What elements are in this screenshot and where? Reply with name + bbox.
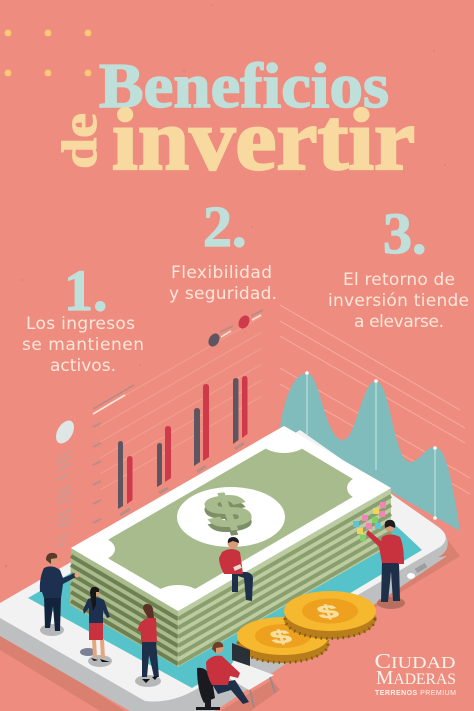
stack left side	[70, 548, 178, 667]
benefit 3: a elevarse.	[354, 312, 444, 332]
title: Beneficios	[99, 50, 389, 121]
dollar symbol: $	[198, 490, 258, 543]
money stack	[69, 426, 391, 667]
benefit 3: El retorno de	[343, 270, 455, 290]
benefit 1: se mantienen	[22, 335, 144, 355]
desk	[225, 660, 274, 690]
brand logo: MADERAS	[376, 667, 456, 689]
chart grid lines	[100, 305, 470, 494]
chair	[196, 668, 220, 710]
benefit 1	[22, 258, 144, 376]
person in suit	[40, 553, 80, 636]
brand logo	[374, 649, 456, 697]
phone drop shadow	[0, 530, 460, 711]
bill corner scallops	[69, 427, 389, 611]
laptop	[232, 643, 250, 666]
phone screen	[28, 440, 422, 688]
title: de	[51, 113, 107, 169]
benefit 2	[169, 194, 277, 304]
benefit 2: 2.	[203, 194, 246, 259]
person at desk	[196, 642, 275, 710]
benefit 3	[328, 201, 469, 332]
person seated on stack	[219, 537, 253, 601]
decorative dots	[5, 30, 91, 76]
benefit 2: y seguridad.	[169, 284, 277, 304]
benefit 1: 1.	[64, 258, 108, 323]
sticky notes	[353, 502, 386, 541]
coins	[237, 591, 376, 663]
bar chart	[118, 376, 248, 515]
chart axis labels	[52, 385, 134, 547]
woman with skirt	[80, 587, 112, 667]
benefit 3: 3.	[383, 201, 426, 266]
dollar symbol: $	[198, 485, 258, 538]
benefit 1: Los ingresos	[26, 314, 135, 334]
bill top	[71, 426, 391, 611]
benefit 1: activos.	[50, 356, 116, 376]
smartphone	[0, 430, 448, 711]
benefit 3: inversión tiende	[328, 291, 469, 311]
brand logo: TERRENOS PREMIUM	[375, 690, 456, 697]
brand logo: CIUDAD	[374, 649, 456, 673]
coin left: $	[267, 627, 295, 648]
slider icons	[206, 310, 263, 349]
woman in red top	[135, 604, 161, 687]
benefit 2: Flexibilidad	[171, 263, 272, 283]
coin right: $	[314, 602, 342, 623]
area chart	[280, 371, 460, 531]
person standing right	[366, 520, 405, 609]
title: invertir	[112, 92, 415, 189]
title	[51, 50, 415, 189]
stack right side	[178, 488, 391, 667]
